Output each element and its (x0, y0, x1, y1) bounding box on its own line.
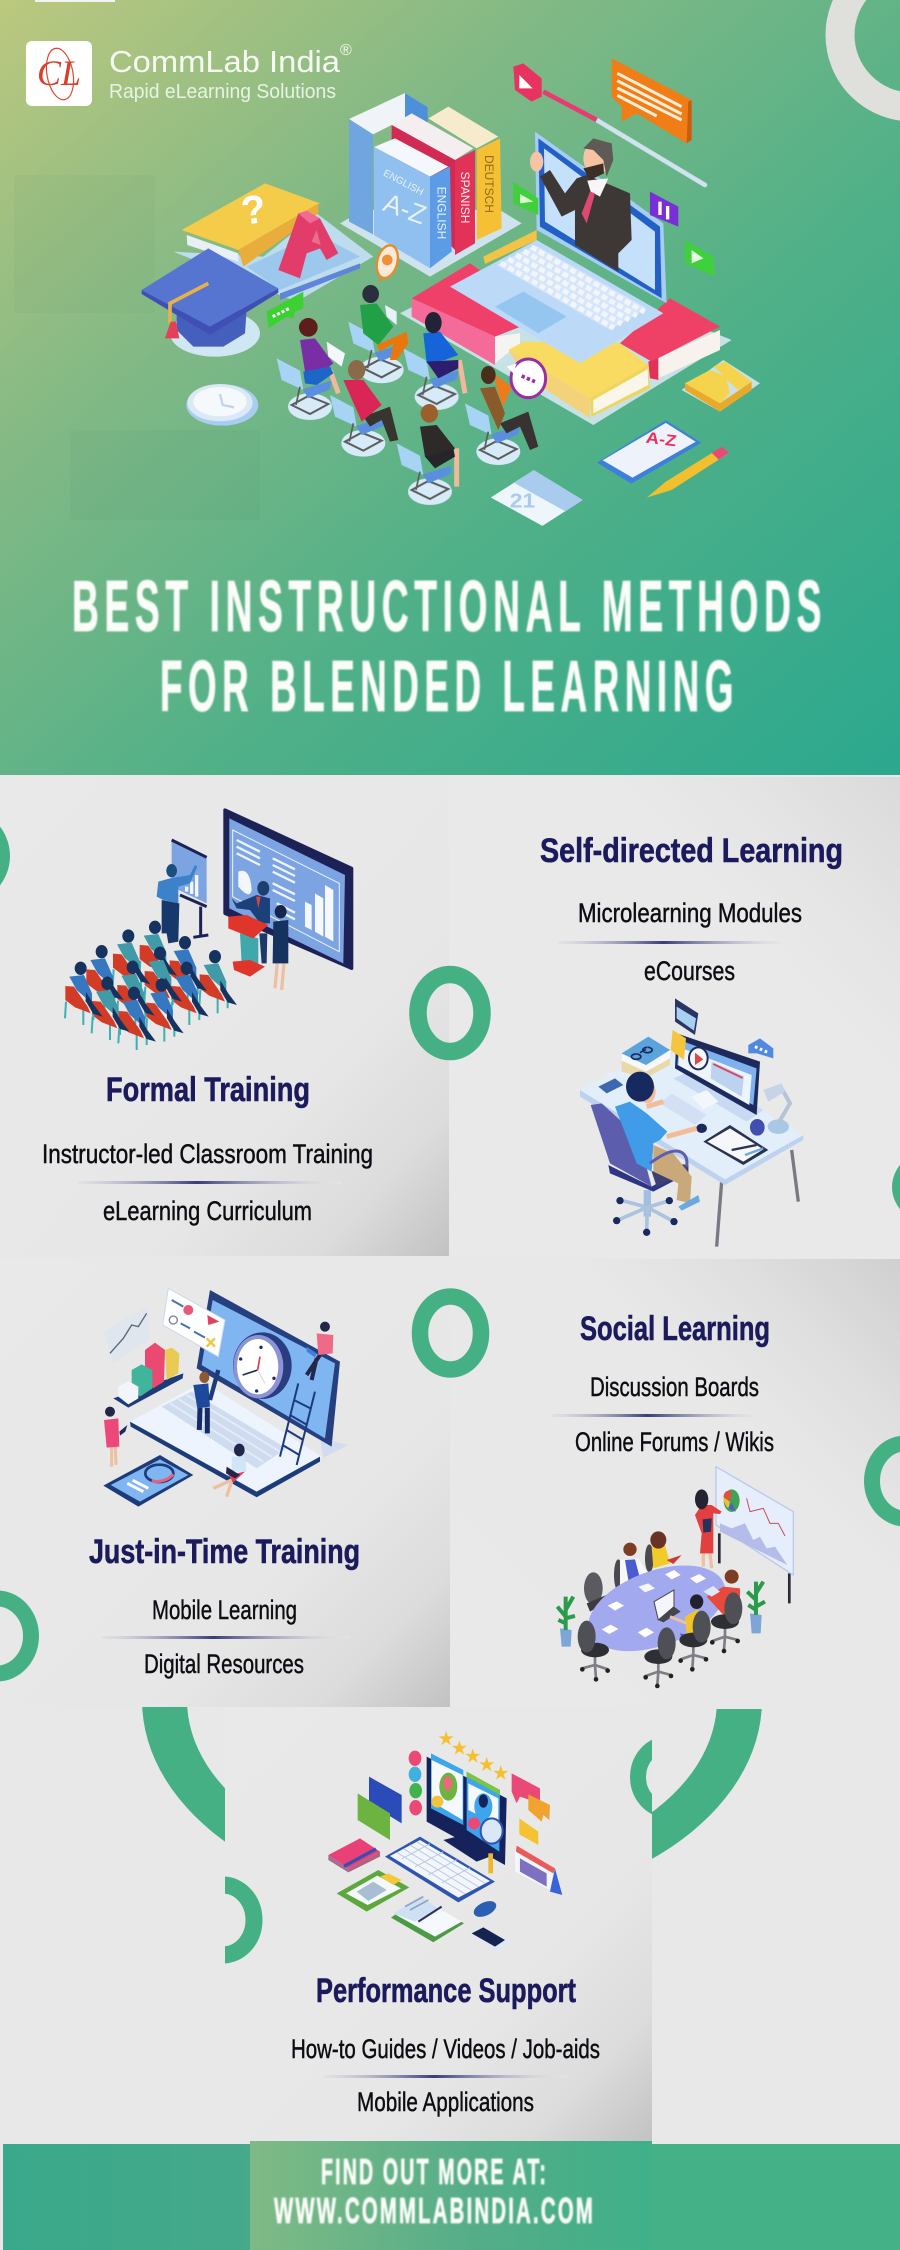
woman in yellow (645, 1531, 682, 1572)
footer call to action: FIND OUT MORE AT: (321, 2151, 548, 2192)
standing woman (273, 905, 288, 990)
decorative ring top right (840, 0, 900, 107)
heading: Just-in-Time Training (89, 1533, 360, 1571)
icon: graduation cap (142, 248, 278, 357)
rating stars: ★ (464, 1746, 481, 1767)
icon: letter A (278, 211, 338, 278)
chat bubble (748, 1038, 773, 1058)
icon: calendar (491, 470, 583, 526)
illustration: laptop with clock (103, 1288, 348, 1507)
panel: header (0, 0, 900, 775)
student dark (420, 404, 457, 487)
rating stars (437, 1729, 509, 1784)
laptop (450, 132, 715, 363)
letter platform (173, 213, 373, 302)
icon: speech bubble (612, 58, 692, 143)
book platform (400, 263, 732, 425)
ladder (280, 1383, 315, 1465)
student purple (299, 318, 345, 393)
plant (557, 1597, 575, 1647)
laptop (130, 1290, 348, 1497)
item: How-to Guides / Videos / Job-aids (291, 2034, 600, 2064)
office chair (591, 1103, 688, 1236)
keyboard and mouse (660, 1093, 707, 1133)
person on screen (307, 1322, 333, 1380)
mouse (471, 1898, 499, 1920)
phone (470, 1926, 512, 1952)
notebook (703, 1125, 768, 1165)
item: Mobile Applications (357, 2087, 534, 2117)
illustration: team meeting (557, 1467, 793, 1688)
pink book (328, 1838, 380, 1872)
woman in pink (104, 1407, 127, 1467)
panel: social learning (450, 1259, 900, 1709)
decorative large arc behind bottom panel (142, 1492, 762, 1908)
icon: tablet (103, 1455, 193, 1507)
icon: media buttons (513, 182, 715, 277)
panel: self-directed learning (449, 777, 900, 1258)
icon: purple chat bubble (507, 359, 546, 398)
illustration: classroom and presenter (65, 810, 352, 1050)
icon: letter M block (682, 360, 760, 412)
title (72, 567, 827, 727)
office chair (678, 1611, 711, 1672)
rating stars: ★ (437, 1729, 455, 1750)
registered mark: ® (340, 42, 352, 59)
item: Instructor-led Classroom Training (42, 1139, 373, 1169)
spine label: SPANISH (458, 172, 472, 223)
bar chart (113, 1343, 183, 1408)
footer url: WWW.COMMLABINDIA.COM (274, 2190, 595, 2231)
illustration: desktop with rating stars (328, 1729, 562, 1952)
book label: ENGLISH (381, 168, 425, 198)
status pills (409, 1751, 422, 1815)
flipchart (172, 840, 208, 937)
panel: just-in-time training (0, 1259, 450, 1707)
calendar (515, 1846, 562, 1895)
yellow book behind laptop (483, 230, 537, 264)
speaker behind podium (232, 881, 270, 963)
seated woman (213, 1444, 247, 1497)
office chair (710, 1592, 742, 1653)
logo (26, 41, 352, 106)
item: eLearning Curriculum (103, 1196, 312, 1226)
decorative rings (0, 818, 900, 1955)
illustration: learners, cap and letter (142, 183, 546, 505)
item: Online Forums / Wikis (575, 1427, 774, 1457)
presenter (695, 1489, 722, 1568)
illustration: learner at desk (580, 998, 803, 1247)
empty chair (584, 1572, 610, 1612)
office chair (643, 1627, 676, 1688)
student green (360, 285, 408, 360)
desk lamp (763, 1083, 790, 1134)
chart grid (103, 1305, 149, 1363)
heading: Formal Training (106, 1071, 310, 1109)
phone on desk (598, 1078, 623, 1093)
teacher (530, 138, 632, 272)
icon: phone: A-Z (645, 428, 678, 450)
icon: calendar: 21 (510, 490, 535, 512)
office chair (578, 1621, 610, 1682)
clipboard (337, 1870, 409, 1912)
red book (412, 263, 720, 380)
books (340, 93, 522, 277)
rating stars: ★ (451, 1738, 468, 1759)
small objects in the header (491, 420, 729, 526)
folders (358, 1777, 402, 1840)
heading: Performance Support (316, 1972, 576, 2010)
person with pencil (193, 1370, 218, 1433)
item: eCourses (644, 956, 735, 986)
student blue (423, 312, 465, 393)
desk (580, 1048, 803, 1247)
item: Mobile Learning (152, 1595, 297, 1625)
item: Microlearning Modules (578, 898, 802, 928)
spine label: DEUTSCH (482, 155, 496, 213)
schedule card (163, 1288, 225, 1357)
book label: A-Z (380, 187, 430, 230)
logo tagline: Rapid eLearning Solutions (109, 81, 336, 103)
heading: Self-directed Learning (540, 832, 843, 870)
icon: clock (186, 384, 258, 426)
podium (228, 915, 268, 977)
whiteboard (716, 1467, 793, 1603)
student red (343, 360, 398, 442)
logo badge: CL (37, 53, 81, 93)
plant (747, 1582, 765, 1633)
floating picture card (675, 998, 698, 1035)
students seated (277, 285, 538, 505)
rating stars: ★ (492, 1763, 509, 1784)
sticky note (671, 1030, 686, 1060)
logo name: CommLab India (109, 44, 341, 79)
yellow book (508, 342, 650, 418)
open book (391, 1897, 464, 1942)
icon: yellow question book (182, 183, 320, 267)
heading: Social Learning (580, 1310, 770, 1348)
icon: play marker and slider (513, 63, 705, 185)
student patterned (480, 366, 538, 450)
icon: green chat bubble (267, 292, 303, 328)
logo badge (26, 41, 92, 106)
presentation screen (225, 810, 352, 968)
rating stars: ★ (478, 1755, 495, 1776)
keyboard (385, 1837, 495, 1902)
chat bubbles and envelope (512, 1773, 550, 1845)
panel: formal training (0, 777, 449, 1256)
cup (750, 1119, 765, 1136)
panel: performance support (225, 1707, 652, 2143)
item: Discussion Boards (590, 1372, 759, 1402)
stack of books (622, 1037, 670, 1078)
illustration: laptop, teacher and books (340, 58, 760, 425)
audience (65, 921, 237, 1050)
icon: yellow question book: ? (238, 187, 269, 234)
table (577, 1549, 737, 1668)
man in blue vest (614, 1543, 650, 1591)
icon: orange chat bubble (373, 243, 401, 283)
clock (233, 1332, 292, 1399)
monitor (427, 1753, 507, 1873)
item: Digital Resources (144, 1649, 304, 1679)
woman at laptop (670, 1594, 704, 1647)
icon: phone (597, 420, 701, 484)
monitor (673, 1033, 763, 1122)
learner (615, 1072, 700, 1211)
icon: pencil (647, 447, 729, 498)
spine label: ENGLISH (434, 187, 448, 239)
footer band (3, 2141, 900, 2250)
man in red (703, 1570, 740, 1617)
standing trainer (157, 864, 197, 943)
